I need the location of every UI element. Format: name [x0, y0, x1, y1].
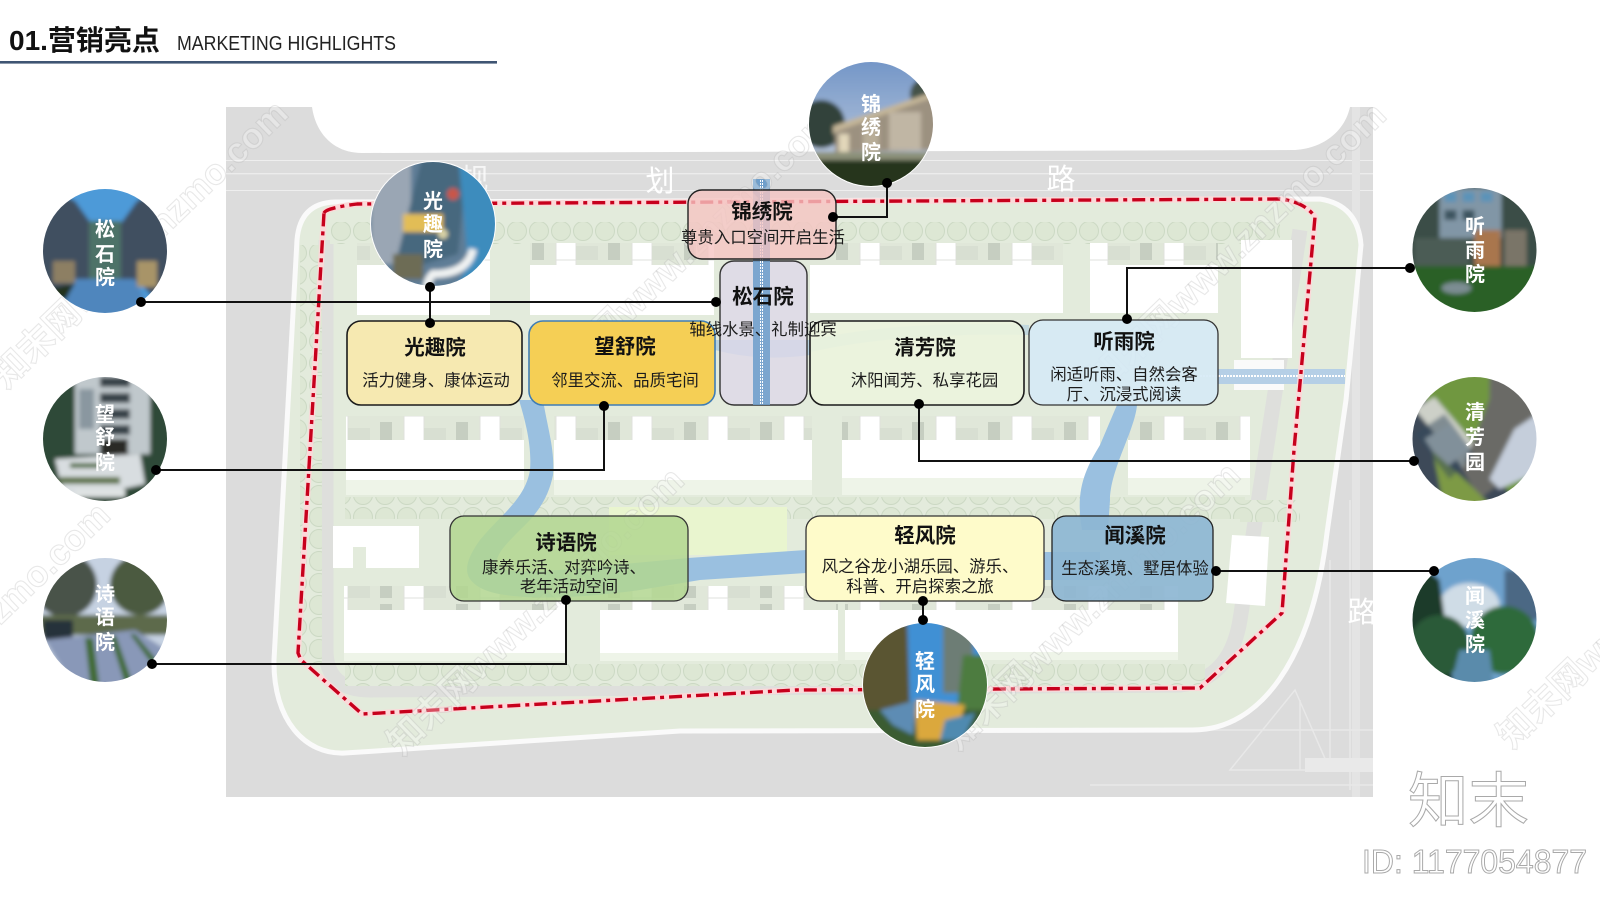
- panel: 闻溪院: 生态溪境、墅居体验: [1061, 559, 1209, 578]
- photo circle: 清芳园: 芳: [1465, 426, 1485, 449]
- photo circle: 松石院: 石: [95, 244, 115, 266]
- panel: 锦绣院: [681, 190, 845, 259]
- internal road ring: [326, 230, 1300, 690]
- photo circle: 松石院: 院: [95, 265, 115, 289]
- photo circle: 松石院: 松: [95, 218, 115, 241]
- text: 松石院 label: 松石院: [732, 284, 794, 308]
- photo circle: 光趣院: 院: [423, 237, 443, 261]
- photo circle: 诗语院: [43, 558, 167, 682]
- photo circle: 清芳园: [1412, 377, 1536, 501]
- site plan: [226, 107, 1377, 797]
- photo circle: 诗语院: 院: [95, 630, 115, 654]
- panel: 诗语院: 诗语院: [535, 530, 597, 554]
- panel: 轻风院: 轻风院: [894, 524, 956, 548]
- panel: 清芳院: 沐阳闻芳、私享花园: [851, 372, 998, 390]
- panel: 光趣院: 光趣院: [404, 336, 466, 360]
- buildings row two: [346, 416, 1250, 495]
- photo circle: 闻溪院: 院: [1465, 632, 1485, 656]
- photo circle: 望舒院: 望: [95, 403, 115, 426]
- panel: 轻风院: 科普、开启探索之旅: [846, 578, 994, 596]
- photo circle: 闻溪院: 溪: [1465, 609, 1485, 632]
- title: [9, 25, 396, 56]
- panel: 松石院: [720, 261, 807, 405]
- photo circle: 诗语院: 语: [95, 606, 115, 629]
- landscaped site: [274, 199, 1361, 753]
- photo circle: 松石院: [43, 189, 167, 313]
- photo circle: 光趣院: 趣: [423, 213, 443, 236]
- panel: 听雨院: 闲适听雨、自然会客: [1050, 366, 1198, 384]
- photo circle: 望舒院: 舒: [95, 425, 115, 449]
- connector: 清芳院: [914, 399, 1419, 466]
- photo circle: 锦绣院: 绣: [861, 116, 881, 139]
- photo circle: 光趣院: 光: [423, 190, 443, 213]
- connector: 望舒院: [151, 401, 609, 475]
- panel: 轻风院: [806, 516, 1044, 601]
- photo circle: 闻溪院: [1412, 558, 1536, 682]
- road labels: 路: [1046, 163, 1076, 196]
- photo circle: 听雨院: 院: [1465, 262, 1485, 286]
- photo circle: 光趣院: [370, 161, 496, 286]
- panel: 清芳院: [810, 321, 1024, 405]
- panel: 诗语院: [450, 516, 688, 601]
- title: 01.营销亮点: [9, 25, 160, 56]
- connector: 松石院: [136, 297, 721, 307]
- text: 松石院 label: [689, 284, 837, 339]
- connector: 诗语院: [147, 595, 571, 669]
- watermarks: 知末网www.znzmo.com: [935, 454, 1248, 758]
- photo circle: 诗语院: 诗: [95, 583, 115, 606]
- photo circle: 轻风院: 轻: [915, 650, 935, 673]
- road labels: 路: [1347, 596, 1377, 629]
- photo circle: 锦绣院: 院: [861, 140, 881, 164]
- photo circle: 锦绣院: [808, 62, 933, 187]
- panel: 光趣院: 活力健身、康体运动: [362, 372, 510, 390]
- panel: 望舒院: 望舒院: [594, 334, 656, 358]
- photo circle: 听雨院: [1412, 188, 1536, 312]
- tree rows: [300, 222, 1300, 686]
- photo circle: 闻溪院: 闻: [1465, 585, 1485, 608]
- panel: 诗语院: 老年活动空间: [520, 578, 618, 596]
- watermarks: 知末网www.znzmo.com: [379, 459, 692, 763]
- panel: 望舒院: 邻里交流、品质宅间: [551, 372, 699, 390]
- photo circle: 听雨院: 雨: [1465, 240, 1485, 262]
- panel: 听雨院: 厅、沉浸式阅读: [1067, 386, 1181, 404]
- photo circle: 锦绣院: 锦: [861, 93, 881, 116]
- road labels: [459, 163, 1377, 629]
- title underline: [0, 61, 497, 64]
- panel: 听雨院: 听雨院: [1093, 330, 1155, 354]
- connector: 闻溪院: [1211, 566, 1439, 576]
- photo circle: 轻风院: 院: [915, 697, 935, 721]
- panel: 闻溪院: [1052, 516, 1213, 601]
- panel: 清芳院: 清芳院: [894, 336, 956, 360]
- road surround: [226, 107, 1373, 797]
- panel: 光趣院: [347, 321, 522, 405]
- photo circle: 望舒院: [43, 377, 167, 501]
- water features: [467, 324, 1137, 598]
- clubhouses: [333, 526, 1269, 606]
- connector: 听雨院: [1122, 263, 1415, 324]
- photo circle: 清芳园: 园: [1465, 452, 1485, 474]
- buildings row one: [357, 240, 1292, 390]
- watermarks: 知末网www.znzmo.com: [529, 100, 842, 404]
- panel: 听雨院: [1029, 320, 1218, 405]
- connector: 轻风院: [918, 596, 928, 625]
- central axis: [753, 179, 770, 405]
- photo circle: 望舒院: 院: [95, 450, 115, 474]
- east water axis: [1200, 369, 1345, 384]
- red boundary line: [298, 199, 1315, 714]
- watermarks: 知末网www.znzmo.com: [1081, 94, 1394, 398]
- central lawn: [609, 507, 787, 555]
- road labels: 规: [459, 163, 489, 196]
- photo circle: 轻风院: [862, 623, 988, 748]
- logo watermark: 知末: [1408, 768, 1529, 835]
- text: 松石院 label: 轴线水景、礼制迎宾: [689, 321, 837, 339]
- panel: 望舒院: [529, 321, 715, 405]
- title: MARKETING HIGHLIGHTS: [177, 33, 396, 55]
- photo circle: 轻风院: 风: [915, 674, 935, 696]
- photo circle: 清芳园: 清: [1465, 401, 1485, 424]
- panel: 轻风院: 风之谷龙小湖乐园、游乐、: [822, 558, 1018, 576]
- watermarks: [0, 92, 1600, 798]
- connector: 光趣院: [425, 282, 435, 328]
- panel: 闻溪院: 闻溪院: [1104, 524, 1166, 548]
- logo watermark: ID: 1177054877: [1362, 843, 1587, 880]
- road labels: 划: [645, 165, 675, 198]
- connector: 锦绣院: [828, 178, 892, 222]
- panel: 锦绣院: 锦绣院: [731, 200, 793, 224]
- buildings row three: [344, 586, 1178, 661]
- logo watermark: [1362, 768, 1587, 880]
- panel: 锦绣院: 尊贵入口空间开启生活: [681, 229, 845, 247]
- panel: 诗语院: 康养乐活、对弈吟诗、: [482, 559, 646, 577]
- photo circle: 听雨院: 听: [1465, 215, 1485, 238]
